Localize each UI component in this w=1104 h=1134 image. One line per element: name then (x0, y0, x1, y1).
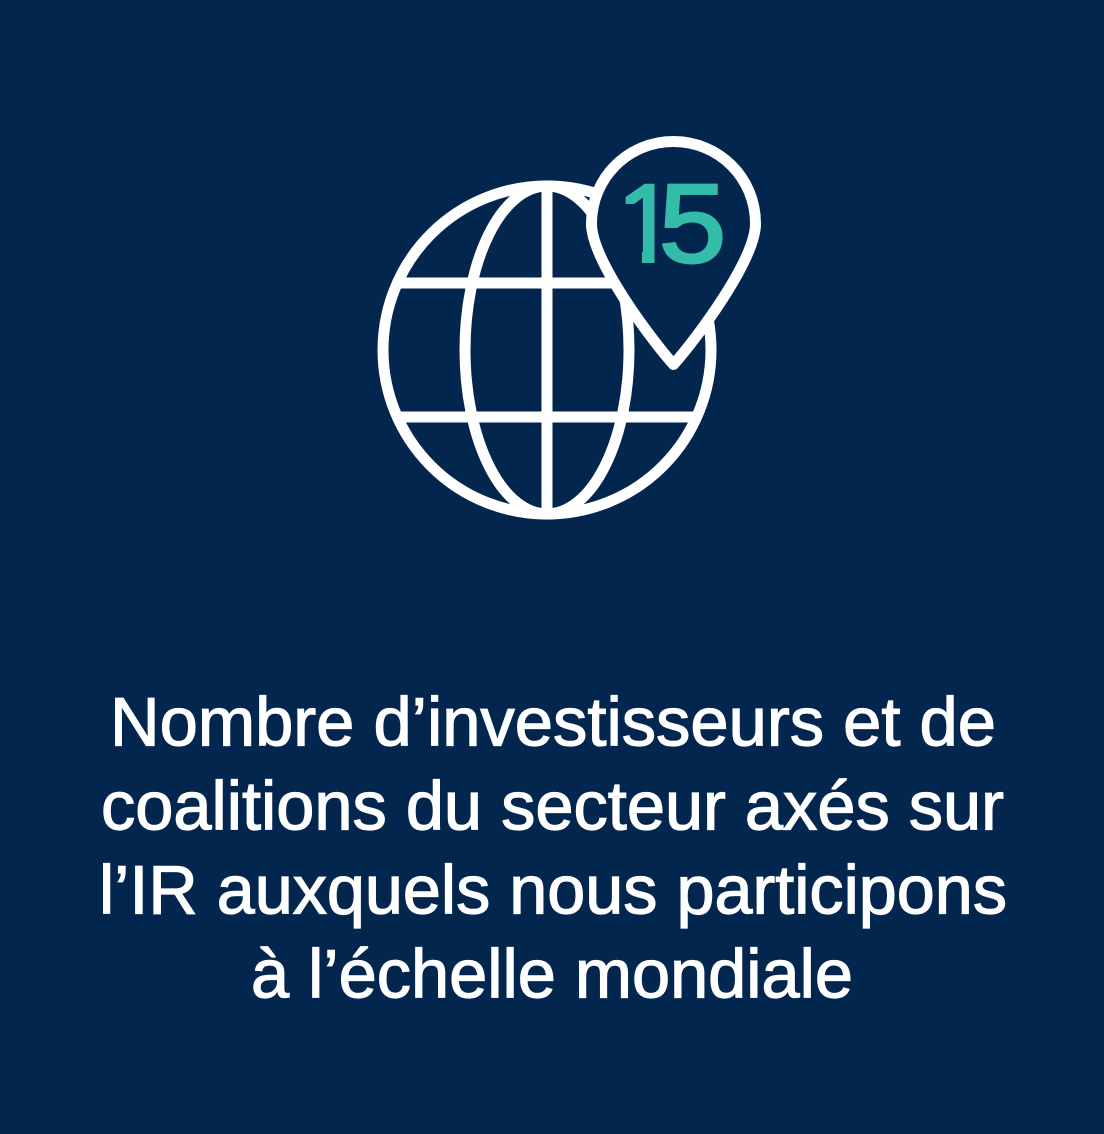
pin number: 1 (616, 162, 678, 286)
description text: l’IR auxquels nous participons (99, 852, 1007, 928)
pin number (626, 184, 723, 264)
description text (99, 684, 1007, 1012)
pin number: 5 (659, 162, 726, 286)
icon: globe (383, 186, 711, 514)
description text: Nombre d’investisseurs et de (110, 684, 996, 760)
description text: coalitions du secteur axés sur (101, 768, 1004, 844)
icon: location pin (592, 142, 756, 364)
description text: à l’échelle mondiale (251, 936, 853, 1012)
icon: globe with location pin (383, 142, 756, 514)
